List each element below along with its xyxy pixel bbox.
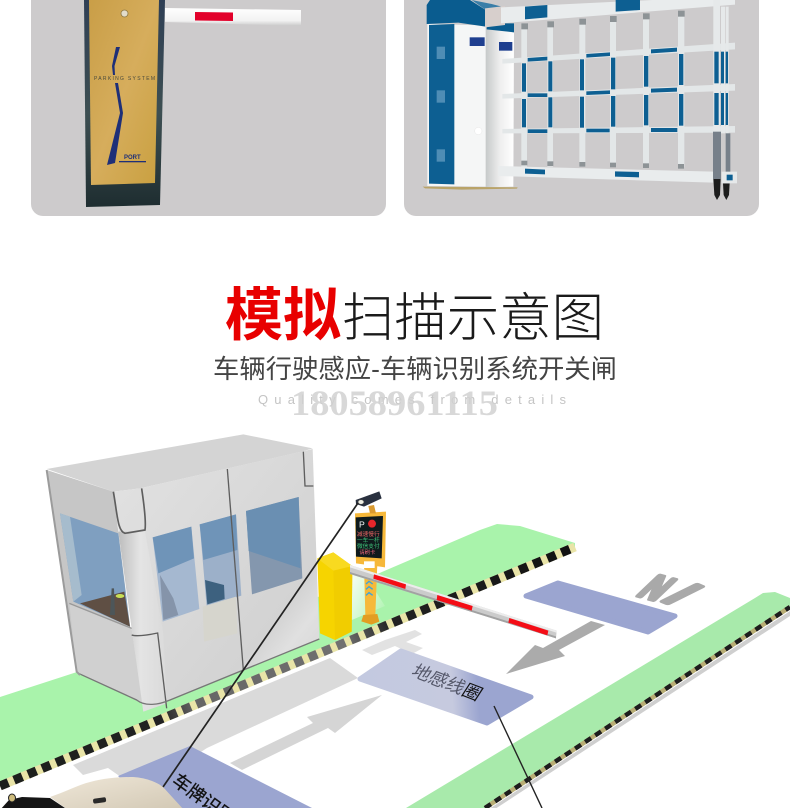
left window xyxy=(60,513,130,627)
blue swoosh decoration xyxy=(107,47,123,165)
LED screen xyxy=(356,516,383,558)
cabinet logos xyxy=(470,37,512,51)
camera xyxy=(356,491,382,507)
blue cabinet door xyxy=(429,24,454,184)
right green kerb strip xyxy=(406,592,790,808)
road marking NI xyxy=(629,569,714,609)
title: 扫描示意图 xyxy=(342,290,604,348)
guard booth xyxy=(47,434,319,712)
door knob xyxy=(475,127,482,135)
english tagline: Quality comes from details xyxy=(258,392,566,407)
base plate xyxy=(423,187,518,190)
camera bracket xyxy=(368,505,376,513)
front window one xyxy=(153,527,199,622)
lattice brackets xyxy=(521,11,685,169)
parking system label: PARKING SYSTEM xyxy=(94,76,155,82)
camera cable line xyxy=(163,503,358,787)
camera lens xyxy=(358,500,364,504)
door lower panel xyxy=(203,597,237,642)
ground loop label: 地感线圈 xyxy=(408,661,486,704)
vents xyxy=(437,47,445,162)
barrier arm xyxy=(165,8,301,26)
phone number watermark: 18058961115 xyxy=(291,383,498,423)
road shadow xyxy=(73,658,358,785)
grey foot plates xyxy=(713,132,730,179)
barrier arm xyxy=(350,565,557,638)
booth left face xyxy=(47,470,142,703)
booth seams xyxy=(69,452,319,708)
direction arrow xyxy=(506,621,605,674)
fence lattice xyxy=(502,14,735,167)
rear pillar xyxy=(486,28,514,187)
drive linkage xyxy=(485,6,505,27)
post base xyxy=(361,614,379,625)
panel: single-arm barrier photo xyxy=(31,0,386,216)
gold front panel xyxy=(89,0,159,185)
blue cap xyxy=(427,0,487,27)
LED screen: 微信支付 xyxy=(357,542,380,550)
hazard stripe kerb xyxy=(485,607,790,808)
lock hole xyxy=(121,10,128,17)
left green kerb strip xyxy=(0,524,575,786)
front window three xyxy=(246,497,302,594)
LED screen: P xyxy=(359,519,365,529)
bottom rail xyxy=(498,166,713,183)
panel: fence barrier photo xyxy=(404,0,759,216)
red stripe on arm xyxy=(195,12,233,21)
title: 模拟 xyxy=(225,284,341,348)
brand mark: PORT xyxy=(124,155,141,161)
end posts xyxy=(713,0,729,133)
LED screen: 一车一杆 xyxy=(357,536,380,544)
top rail xyxy=(501,0,735,23)
road arrow xyxy=(230,695,382,770)
black rubber feet xyxy=(713,179,730,200)
booth front face xyxy=(113,449,319,712)
end bracket xyxy=(722,172,737,183)
title xyxy=(225,284,604,348)
ground loop cable line xyxy=(494,706,542,808)
plate recognition pad xyxy=(118,746,312,808)
subtitle: 车辆行驶感应-车辆识别系统开关闸 xyxy=(213,354,617,384)
LED screen: 减速慢行 xyxy=(357,530,380,538)
barrier housing xyxy=(84,0,165,207)
sign lamp xyxy=(364,561,375,568)
gate cabinet xyxy=(317,552,352,640)
far blue sensor pad xyxy=(526,583,675,632)
foreground camera xyxy=(0,777,184,808)
road mark near loop xyxy=(362,630,423,655)
LED screen: 请刷卡 xyxy=(359,548,376,556)
brand mark xyxy=(119,155,146,162)
post chevrons xyxy=(366,581,373,595)
lamp post xyxy=(364,563,377,615)
main cabinet xyxy=(427,24,486,187)
front window two xyxy=(200,514,241,607)
hazard stripe kerb xyxy=(0,547,575,786)
yellow barrier gate and sign post xyxy=(317,491,557,640)
road marking NI: N xyxy=(629,569,684,607)
road marking NI: I xyxy=(651,579,714,609)
ground loop pad xyxy=(360,651,531,723)
rounded corner post xyxy=(118,532,167,712)
lattice blue bands xyxy=(522,48,683,133)
booth roof xyxy=(47,434,313,492)
sign panel xyxy=(355,512,386,567)
